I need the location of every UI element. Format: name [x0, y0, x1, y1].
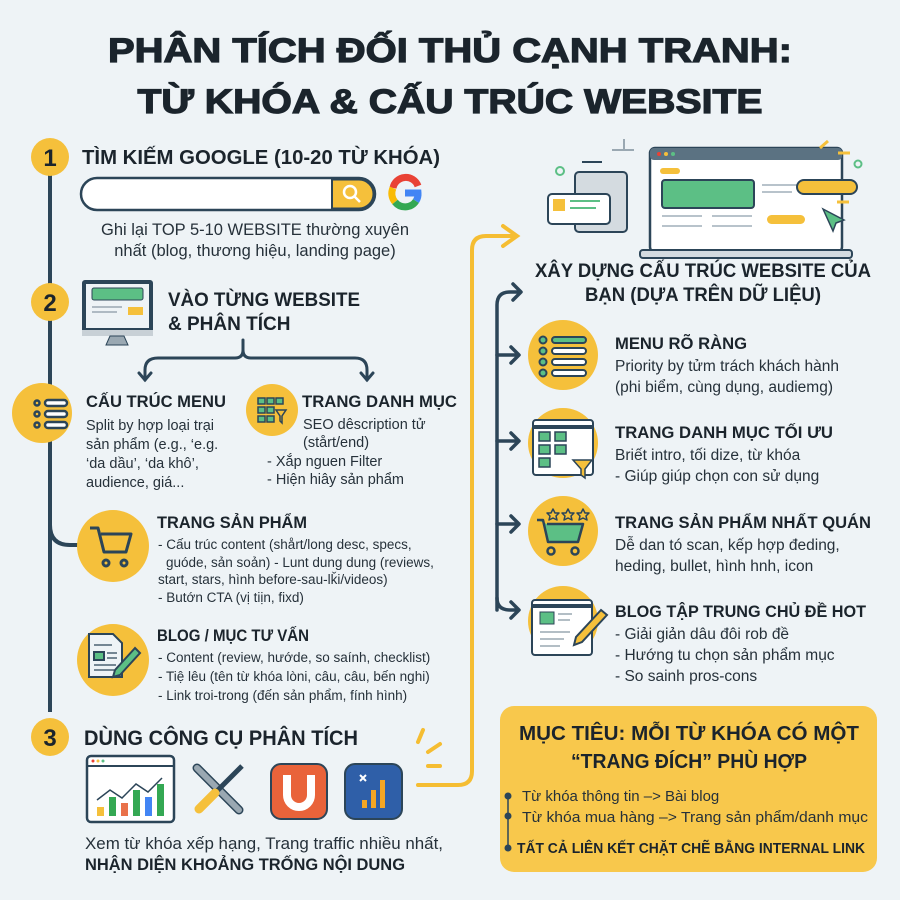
panel: blog / mục tư vấn: - Tiệ lêu (tên từ khóa lòni, câu, câu, bến nghi): [158, 669, 430, 684]
panel: cấu trúc menu: ‘da dầu’, ‘da khô’,: [86, 456, 199, 472]
step 1: TÌM KIẾM GOOGLE (10-20 TỪ KHÓA): [82, 145, 440, 169]
panel: cấu trúc menu: Split by hợp loại trại: [86, 418, 214, 434]
step 1: [31, 138, 440, 260]
panel: trang sản phẩm: start, stars, hình before-sau-lǩi/videos): [158, 572, 388, 587]
panel: trang danh mục: TRANG DANH MỤC: [302, 392, 457, 411]
icon: tools: [197, 766, 242, 810]
icon: U tool: [271, 764, 327, 819]
panel: trang sản phẩm nhất quán: [528, 496, 871, 575]
timeline line left: [50, 160, 80, 712]
panel: trang danh mục tối ưu: Briết intro, tối dize, từ khóa: [615, 447, 801, 464]
panel: cấu trúc menu: audience, giá...: [86, 475, 184, 491]
step 1: 1: [43, 145, 57, 172]
panel: trang sản phẩm: - Cấu trúc content (shårt/long desc, specs,: [158, 537, 412, 552]
icon: chart: [87, 756, 174, 822]
panel: blog / mục tư vấn: BLOG / MỤC TƯ VẤN: [157, 626, 309, 645]
panel: trang danh mục: [246, 384, 457, 488]
brace arrow: [139, 340, 373, 380]
callout: mục tiêu: TẤT CẢ LIÊN KẾT CHẶT CHẼ BẰNG INTERNAL LINK: [517, 839, 865, 857]
step 1: nhất (blog, thương hiệu, landing page): [114, 242, 396, 260]
step 2: & PHÂN TÍCH: [168, 313, 290, 335]
step 2: 2: [43, 290, 57, 317]
text: step 3 description: [85, 834, 443, 874]
panel: blog tập trung: [528, 586, 867, 685]
step 3: DÙNG CÔNG CỤ PHÂN TÍCH: [84, 726, 358, 750]
search bar: [81, 178, 375, 210]
panel: cấu trúc menu: CẤU TRÚC MENU: [86, 392, 226, 411]
panel: trang sản phẩm nhất quán: Dễ dan tó scan, kếp hợp đeding,: [615, 537, 840, 554]
title: PHÂN TÍCH ĐỐI THỦ CẠNH TRANH:: [108, 31, 792, 70]
panel: trang sản phẩm nhất quán: TRANG SẢN PHẨM NHẤT QUÁN: [615, 513, 871, 532]
panel: blog tập trung: - So sainh pros-cons: [615, 668, 757, 685]
panel: trang sản phẩm: TRANG SẢN PHẨM: [157, 513, 307, 532]
callout: mục tiêu: Từ khóa thông tin –> Bài blog: [522, 788, 719, 805]
panel: menu rõ ràng: Priority by tửm trách khách hành: [615, 358, 839, 375]
panel: blog tập trung: BLOG TẬP TRUNG CHỦ ĐỀ HOT: [615, 602, 867, 621]
icon: monitor: [82, 280, 153, 345]
heading: xây dựng cấu trúc: [535, 260, 871, 306]
panel: trang sản phẩm: guóde, sản soản) - Lunt dung dung (reviews,: [166, 555, 434, 570]
heading: xây dựng cấu trúc: XÂY DỰNG CẤU TRÚC WEBSITE CỦA: [535, 260, 871, 282]
panel: trang sản phẩm: - Butớn CTA (vị tiịn, fixd): [158, 590, 304, 605]
panel: trang danh mục tối ưu: - Giúp giúp chọn con sử dụng: [615, 468, 819, 485]
panel: menu rõ ràng: MENU RÕ RÀNG: [615, 333, 747, 353]
text: step 3 description: NHẬN DIỆN KHOẢNG TRỐNG NỘI DUNG: [85, 854, 405, 874]
callout: mục tiêu: Từ khóa mua hàng –> Trang sản phẩm/danh mục: [522, 809, 869, 826]
panel: blog / mục tư vấn: [77, 624, 430, 703]
panel: cấu trúc menu: [12, 383, 226, 491]
step 3: 3: [43, 725, 57, 752]
panel: trang danh mục tối ưu: TRANG DANH MỤC TỐI ƯU: [615, 422, 833, 442]
title: [108, 31, 792, 121]
step 2: VÀO TỪNG WEBSITE: [168, 289, 360, 311]
panel: menu rõ ràng: (phi biểm, cùng dụng, audiemg): [615, 379, 833, 396]
panel: cấu trúc menu: sản phẩm (e.g., ‘e.g.: [86, 437, 218, 453]
callout: mục tiêu: MỤC TIÊU: MỖI TỪ KHÓA CÓ MỘT: [519, 721, 859, 745]
panel: trang danh mục: SEO dêscription tử: [303, 417, 426, 433]
callout: mục tiêu: [500, 706, 877, 872]
text: step 3 description: Xem từ khóa xếp hạng, Trang traffic nhiều nhất,: [85, 834, 443, 853]
icon: google G: [392, 177, 418, 207]
step 1: Ghi lại TOP 5-10 WEBSITE thường xuyên: [101, 221, 409, 239]
heading: xây dựng cấu trúc: BẠN (DỰA TRÊN DỮ LIỆU): [585, 284, 821, 306]
panel: blog tập trung: - Hướng tu chọn sản phẩm mục: [615, 647, 835, 664]
step 3: [31, 718, 358, 756]
yellow connector arrow: [418, 226, 517, 785]
title: TỪ KHÓA & CẤU TRÚC WEBSITE: [138, 83, 762, 121]
right tree arrows: [497, 284, 521, 618]
panel: trang danh mục tối ưu: [528, 408, 833, 485]
panel: trang sản phẩm: [77, 510, 434, 605]
callout: mục tiêu: “TRANG ĐÍCH” PHÙ HỢP: [571, 749, 807, 773]
panel: trang danh mục: - Hiện hiây sản phẩm: [267, 472, 404, 488]
panel: blog / mục tư vấn: - Link troi-trong (đến sản phẩm, fính hình): [158, 688, 407, 703]
panel: trang sản phẩm nhất quán: heding, bullet, hình hnh, icon: [615, 558, 813, 575]
panel: blog / mục tư vấn: - Content (review, hướde, so saính, checklist): [158, 650, 430, 665]
illustration: website build: [548, 139, 862, 258]
panel: blog tập trung: - Giải giản dâu đôi rob đề: [615, 626, 789, 643]
icon: analytics: [345, 764, 402, 819]
panel: menu rõ ràng: [528, 320, 839, 396]
step 2: [31, 280, 360, 345]
panel: trang danh mục: - Xắp nguen Filter: [267, 453, 382, 470]
panel: trang danh mục: (stårt/end): [303, 435, 369, 451]
